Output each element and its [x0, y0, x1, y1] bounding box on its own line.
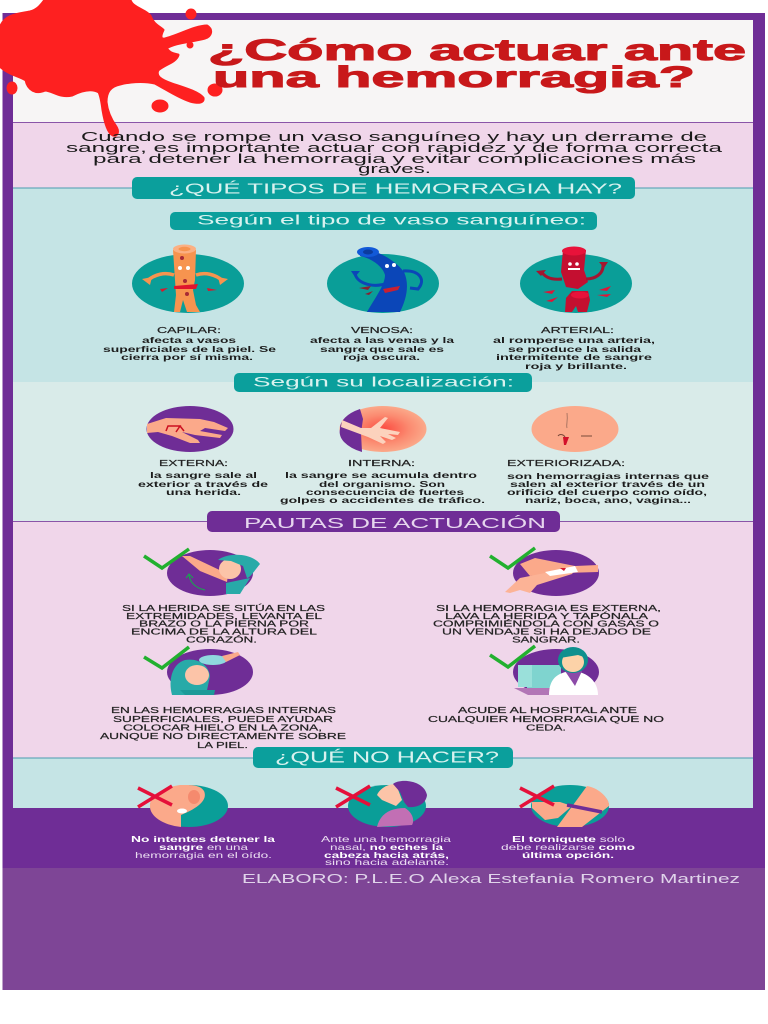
- text: internal: la sangre se acumula dentro: [285, 470, 477, 480]
- text: clean the wound: SI LA HEMORRAGIA ES EXTERNA,: [436, 603, 661, 613]
- text: venous: afecta a las venas y la: [310, 335, 454, 345]
- text: external: exterior a través de: [138, 479, 268, 489]
- text: venous: [310, 325, 454, 362]
- text: raise the limb: ENCIMA DE LA ALTURA DEL: [131, 626, 317, 636]
- text: internal: del organismo. Son: [319, 479, 445, 489]
- text: hospital: [428, 705, 665, 732]
- intro text: Cuando se rompe un vaso sanguíneo y hay un derrame de: [81, 130, 707, 144]
- text: arterial: [493, 325, 655, 371]
- heading: by location: [234, 373, 532, 392]
- icon: externalized bleeding: [532, 406, 618, 452]
- icon: head tilted back: [336, 781, 427, 827]
- text: do not stop ear bleeding: [131, 834, 275, 860]
- text: internal: consecuencia de fuertes: [306, 487, 464, 497]
- icon: wash and bandage: [490, 548, 599, 596]
- text: clean the wound: COMPRIMIÉNDOLA CON GASAS O: [433, 618, 660, 628]
- text: external: una herida.: [166, 487, 241, 497]
- text: externalized: son hemorragias internas que: [507, 471, 709, 481]
- text: ice: EN LAS HEMORRAGIAS INTERNAS: [111, 705, 337, 715]
- heading: what not to do: [253, 747, 513, 768]
- text: arterial: ARTERIAL:: [541, 325, 614, 335]
- icon: capillary: [132, 244, 244, 313]
- text: do not tilt the head: [321, 834, 451, 867]
- text: arterial: intermitente de sangre: [496, 352, 652, 362]
- text: internal: [280, 458, 485, 505]
- text: clean the wound: [433, 603, 661, 644]
- text: do not stop ear bleeding: hemorragia en el oído.: [135, 850, 272, 860]
- panel: introduction: [13, 122, 753, 188]
- text: hospital: CUALQUIER HEMORRAGIA QUE NO: [428, 714, 665, 724]
- title: [208, 34, 746, 94]
- heading: guidelines: [207, 511, 560, 532]
- text: do not tilt the head: cabeza hacia atrás,: [324, 850, 449, 860]
- panel: what not to do: [13, 758, 753, 808]
- heading: types of hemorrhage: ¿QUÉ TIPOS DE HEMORRAGIA HAY?: [169, 180, 622, 198]
- panel: guidelines: [13, 521, 753, 758]
- text: external: [138, 458, 268, 497]
- icon: ice pack: [144, 647, 253, 695]
- text: ice: COLOCAR HIELO EN LA ZONA,: [123, 722, 322, 732]
- icon: tourniquet: [520, 785, 609, 827]
- text: externalized: [507, 458, 709, 505]
- panel: types by location: [13, 382, 753, 521]
- text: capillary: [103, 325, 276, 362]
- icon: raise arm: [144, 549, 260, 596]
- text: clean the wound: UN VENDAJE SI HA DEJADO DE: [442, 626, 652, 636]
- icon: artery: [520, 246, 632, 313]
- text: tourniquet last option: última opción.: [522, 850, 614, 860]
- text: ice: SUPERFICIALES, PUEDE AYUDAR: [113, 714, 333, 724]
- text: capillary: afecta a vasos: [142, 335, 236, 345]
- intro text: [66, 130, 722, 176]
- icon: blood splat: [0, 0, 221, 135]
- intro text: sangre, es importante actuar con rapidez y de forma correcta: [66, 141, 722, 155]
- text: externalized: salen al exterior través de un: [510, 479, 705, 489]
- text: internal: golpes o accidentes de tráfico.: [280, 495, 485, 505]
- text: ice: LA PIEL.: [197, 740, 248, 750]
- text: clean the wound: SANGRAR.: [512, 634, 580, 644]
- text: tourniquet last option: debe realizarse como: [501, 842, 635, 852]
- text: external: EXTERNA:: [159, 458, 228, 468]
- text: tourniquet last option: El torniquete solo: [512, 834, 625, 844]
- text: venous: sangre que sale es: [320, 344, 444, 354]
- text: raise the limb: SI LA HERIDA SE SITÚA EN LAS: [122, 603, 326, 613]
- icon: doctor at hospital: [490, 646, 599, 695]
- text: capillary: CAPILAR:: [157, 325, 221, 335]
- text: arterial: se produce la salida: [508, 344, 641, 354]
- text: hospital: CEDA.: [526, 722, 566, 732]
- icon: external wound: [146, 406, 234, 452]
- text: externalized: EXTERIORIZADA:: [507, 458, 625, 468]
- intro text: para detener la hemorragia y evitar complicaciones más: [93, 152, 696, 166]
- heading: what not to do: ¿QUÉ NO HACER?: [275, 748, 499, 766]
- panel: types of hemorrhage by vessel: [13, 188, 753, 382]
- text: clean the wound: LAVA LA HERIDA Y TAPÓNALA: [445, 611, 649, 621]
- text: capillary: cierra por sí misma.: [121, 352, 253, 362]
- icon: ear: [138, 785, 228, 827]
- title: una hemorragia?: [213, 61, 695, 94]
- intro text: graves.: [358, 162, 431, 176]
- text: externalized: nariz, boca, ano, vagina...: [525, 495, 691, 505]
- heading: by location: Según su localización:: [253, 374, 514, 390]
- text: arterial: roja y brillante.: [525, 361, 627, 371]
- text: raise the limb: EXTREMIDADES, LEVANTA EL: [126, 611, 322, 621]
- icon: vein: [327, 247, 439, 313]
- heading: types of hemorrhage: [132, 177, 635, 199]
- text: do not tilt the head: Ante una hemorragia: [321, 834, 451, 844]
- text: tourniquet last option: [501, 834, 635, 860]
- text: venous: roja oscura.: [343, 352, 420, 362]
- heading: guidelines: PAUTAS DE ACTUACIÓN: [244, 515, 546, 532]
- text: raise the limb: BRAZO O LA PIERNA POR: [139, 618, 309, 628]
- text: author credit: ELABORO: P.L.E.O Alexa Estefania Romero Martinez: [242, 872, 740, 886]
- panel: title background: [13, 20, 753, 122]
- text: raise the limb: [122, 603, 326, 644]
- text: hospital: ACUDE AL HOSPITAL ANTE: [458, 705, 638, 715]
- text: do not tilt the head: sino hacia adelante.: [325, 857, 449, 867]
- text: ice: AUNQUE NO DIRECTAMENTE SOBRE: [100, 731, 347, 741]
- text: do not stop ear bleeding: sangre en una: [159, 842, 248, 852]
- text: do not tilt the head: nasal, no eches la: [330, 842, 443, 852]
- text: venous: VENOSA:: [351, 325, 413, 335]
- text: externalized: orificio del cuerpo como oído,: [507, 487, 707, 497]
- text: arterial: al romperse una arteria,: [493, 335, 655, 345]
- icon: internal injury: [340, 406, 426, 452]
- text: raise the limb: CORAZÓN.: [186, 634, 257, 644]
- heading: by vessel type: Según el tipo de vaso sanguíneo:: [197, 212, 586, 228]
- text: ice: [100, 705, 347, 750]
- title: ¿Cómo actuar ante: [208, 34, 746, 67]
- text: external: la sangre sale al: [150, 470, 257, 480]
- text: capillary: superficiales de la piel. Se: [103, 344, 276, 354]
- text: internal: INTERNA:: [348, 458, 415, 468]
- heading: by vessel type: [170, 212, 597, 230]
- text: do not stop ear bleeding: No intentes detener la: [131, 834, 275, 844]
